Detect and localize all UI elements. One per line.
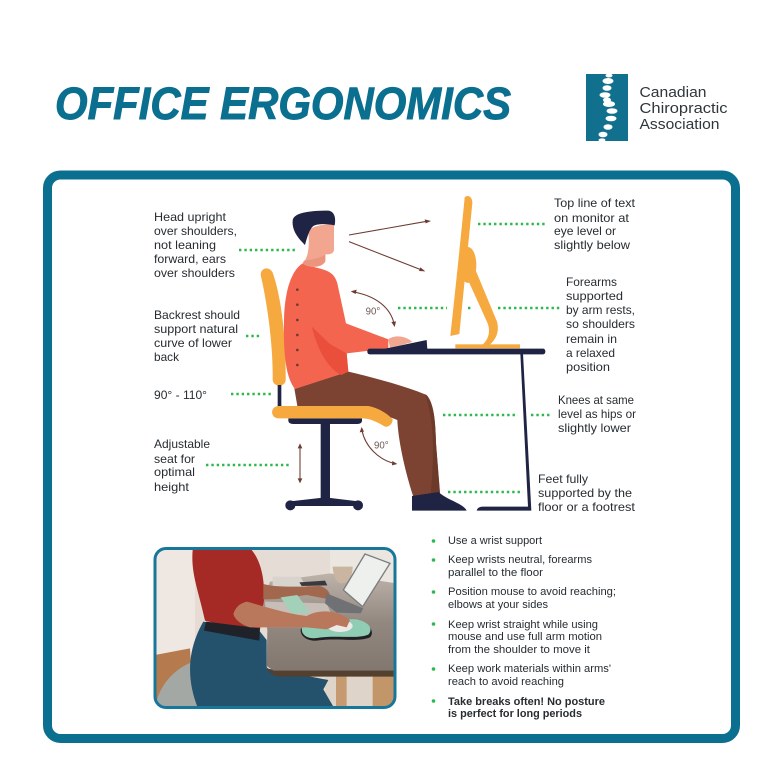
text: monitor: on monitor at [554, 211, 630, 225]
hair [293, 211, 335, 245]
text: recline angle: 90° - 110° [154, 388, 207, 402]
text: forearms: so shoulders [566, 317, 635, 331]
text: head upright: not leaning [154, 238, 216, 252]
text: forearms: by arm rests, [566, 303, 635, 317]
desk [367, 349, 545, 354]
torso [284, 263, 388, 389]
desk top [263, 573, 397, 672]
bullet: wrists neutral: Keep wrists neutral, forearms [448, 554, 592, 566]
text: forearms: position [566, 360, 610, 374]
text: monitor: slightly below [554, 238, 631, 252]
bullet: mouse position: elbows at your sides [448, 599, 548, 611]
illustration: seated person at desk: 90° [366, 307, 380, 318]
text: monitor: Top line of text [554, 196, 636, 210]
text: knees [558, 393, 636, 435]
monitor screen [450, 196, 472, 336]
text: backrest [154, 308, 240, 364]
text: monitor: eye level or [554, 224, 616, 238]
monitor stand [465, 261, 498, 346]
text: head upright: over shoulders [154, 266, 235, 280]
text: knees: slightly lower [558, 421, 631, 435]
bullet: wrist straight: Keep wrist straight while using [448, 619, 598, 631]
spine dots [296, 288, 299, 366]
jeans [190, 622, 333, 707]
text: knees: level as hips or [558, 407, 636, 421]
hand [388, 336, 412, 348]
text: feet: Feet fully [538, 472, 588, 486]
text: adjustable seat: height [154, 480, 190, 494]
text: feet [538, 472, 636, 514]
stool [157, 662, 197, 706]
text: adjustable seat: optimal [154, 465, 195, 479]
chair post [278, 385, 281, 407]
chair base [285, 418, 363, 510]
bullet: wrist straight: from the shoulder to move it [448, 644, 590, 656]
dotted leader lines [206, 224, 560, 492]
bullet: work materials [432, 663, 611, 688]
text: backrest: Backrest should [154, 308, 240, 322]
panel: main frame [48, 175, 736, 738]
bullet: wrist straight [432, 619, 602, 656]
light table area [265, 602, 332, 627]
sight lines [300, 221, 427, 480]
papers and phone [273, 577, 307, 587]
text: forearms: remain in [566, 332, 617, 346]
near arm [233, 602, 350, 629]
left wrist rest [281, 595, 310, 614]
wall [190, 550, 325, 692]
text: adjustable seat: seat for [154, 452, 195, 466]
text: monitor [554, 196, 636, 252]
text: head upright: over shoulders, [154, 224, 237, 238]
shoe [412, 492, 467, 511]
desk leg [477, 353, 531, 511]
keyboard [382, 340, 427, 349]
neck and head [303, 224, 334, 267]
belt [204, 622, 260, 641]
text: knees: Knees at same [558, 393, 634, 407]
text: adjustable seat [154, 437, 210, 494]
text: feet: floor or a footrest [538, 500, 636, 514]
text: backrest: support natural [154, 322, 238, 336]
floor [156, 648, 190, 700]
text: forearms: Forearms [566, 275, 617, 289]
logo: Canadian Chiropractic Association: Canadian [640, 85, 706, 101]
bullet: mouse position [432, 586, 616, 611]
arm shading [312, 327, 348, 375]
logo: Canadian Chiropractic Association: Association [640, 117, 720, 133]
logo: Canadian Chiropractic Association [586, 74, 728, 142]
bullet: work materials: reach to avoid reaching [448, 676, 564, 688]
bullet: wrist support: Use a wrist support [448, 535, 542, 547]
text: backrest: back [154, 350, 179, 364]
text: head upright [154, 210, 237, 280]
bullet: work materials: Keep work materials within arms' [448, 663, 611, 675]
bullet: take breaks: is perfect for long periods [448, 708, 582, 720]
laptop screen [343, 554, 390, 607]
illustration: seated person at desk [261, 196, 545, 511]
photo: woman at desk with wrist supports [154, 547, 396, 709]
bullet: mouse position: Position mouse to avoid reaching; [448, 586, 616, 598]
mouse pad [300, 627, 372, 641]
bullet list [432, 535, 616, 720]
text: head upright: forward, ears [154, 252, 226, 266]
bullet: take breaks [432, 696, 605, 720]
bullet: take breaks: Take breaks often! No posture [448, 696, 605, 708]
cup [333, 567, 353, 583]
shirt [192, 550, 264, 629]
bullet: wrist straight: mouse and use full arm motion [448, 631, 602, 643]
chair backrest [261, 268, 286, 385]
text: forearms [566, 275, 635, 374]
text: forearms: a relaxed [566, 346, 615, 360]
illustration: seated person at desk: 90° [374, 441, 389, 452]
text: adjustable seat: Adjustable [154, 437, 210, 451]
text: forearms: supported [566, 289, 623, 303]
text: backrest: curve of lower [154, 336, 232, 350]
mouse [328, 622, 353, 632]
text: feet: supported by the [538, 486, 632, 500]
chair seat [272, 406, 393, 427]
logo: Canadian Chiropractic Association: Chiropractic [640, 101, 728, 117]
legs [294, 372, 440, 497]
title: OFFICE ERGONOMICS [55, 78, 511, 129]
far arm [263, 584, 330, 599]
bullet: wrists neutral: parallel to the floor [448, 567, 544, 579]
laptop base [325, 593, 363, 613]
bullet: wrists neutral [432, 554, 592, 579]
text: head upright: Head upright [154, 210, 227, 224]
